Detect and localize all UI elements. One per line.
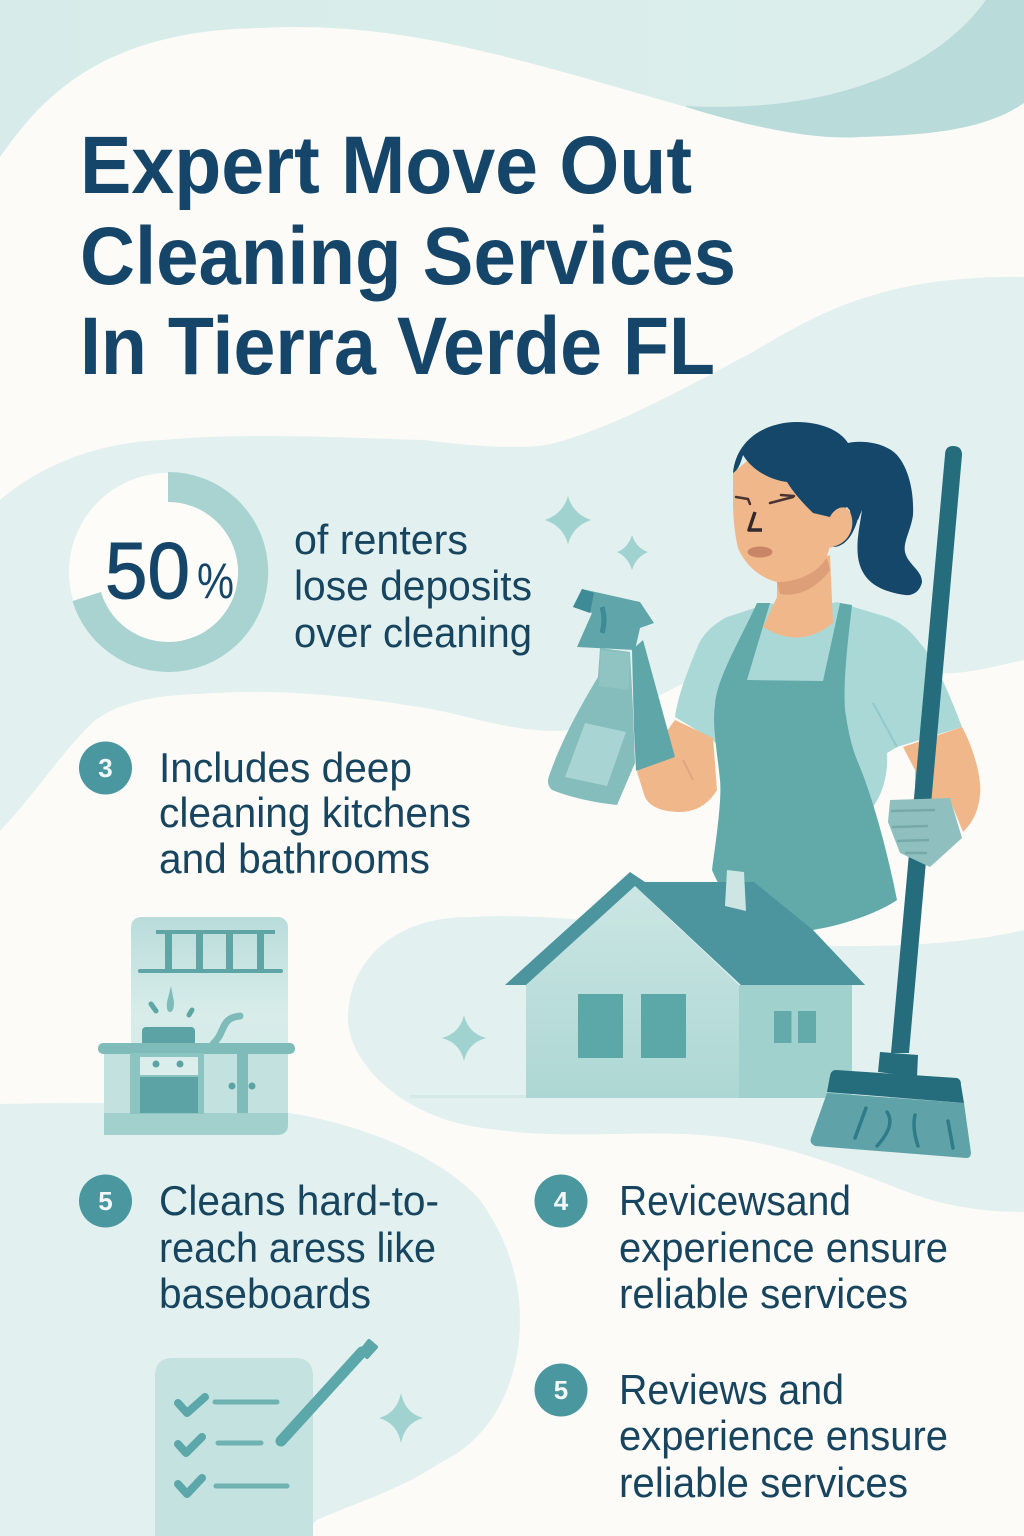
item 3: deep cleaning [79, 742, 471, 882]
stat text: renters lose deposits [294, 516, 532, 656]
title: In Tierra Verde FL [80, 301, 715, 392]
right glove [888, 798, 962, 867]
icon: sparkles near spray [545, 496, 648, 570]
stat text: renters lose deposits: of renters [294, 516, 468, 563]
item 5: reviews and experience: Reviews and [619, 1366, 844, 1413]
neck shadow [777, 558, 830, 595]
left arm [637, 720, 717, 812]
donut chart: 50%: % [197, 553, 234, 609]
item 5: hard-to-reach areas: baseboards [159, 1270, 371, 1317]
house roof over apron [690, 870, 865, 985]
face features [736, 495, 794, 558]
item 5: reviews and experience [534, 1364, 948, 1506]
shirt [675, 602, 962, 810]
ear [829, 507, 852, 548]
item 5: hard-to-reach areas: Cleans hard-to- [159, 1177, 439, 1224]
item 5: reviews and experience: experience ensure [619, 1412, 948, 1459]
face [733, 450, 832, 582]
illustration: woman cleaning [548, 422, 980, 1158]
item 4: reviews and experience: experience ensure [619, 1224, 948, 1271]
item 4: reviews and experience: 4 [554, 1186, 569, 1216]
item 5: reviews and experience: 5 [554, 1375, 568, 1405]
title: Cleaning Services [80, 211, 736, 302]
icon: sparkle near house [442, 1015, 486, 1061]
item 5: reviews and experience: reliable services [619, 1459, 908, 1506]
icon: kitchen [98, 917, 295, 1135]
title [80, 120, 736, 392]
item 5: hard-to-reach areas [79, 1174, 439, 1317]
item 3: deep cleaning: cleaning kitchens [159, 789, 471, 836]
item 3: deep cleaning: 3 [98, 753, 113, 783]
left glove [632, 640, 675, 771]
neck and chest [763, 555, 833, 638]
item 3: deep cleaning: and bathrooms [159, 835, 430, 882]
icon: sparkle near checklist [379, 1393, 423, 1443]
broom [810, 446, 971, 1158]
stat text: renters lose deposits: lose deposits [294, 562, 532, 609]
donut chart: 50%: 50 [105, 526, 190, 615]
donut chart: 50% [69, 472, 268, 672]
stat text: renters lose deposits: over cleaning [294, 609, 532, 656]
item 3: deep cleaning: Includes deep [159, 744, 412, 791]
item 4: reviews and experience: Revicewsand [619, 1177, 851, 1224]
title: Expert Move Out [80, 120, 692, 211]
item 4: reviews and experience [534, 1174, 948, 1317]
hair and ponytail [733, 422, 922, 595]
item 5: hard-to-reach areas: reach aress like [159, 1224, 436, 1271]
icon: checklist and pencil [155, 1341, 376, 1536]
right arm [903, 727, 980, 832]
icon: house [410, 872, 865, 1098]
spray bottle [548, 589, 654, 805]
item 4: reviews and experience: reliable services [619, 1270, 908, 1317]
hair behind ear [831, 510, 860, 547]
apron [712, 603, 897, 930]
item 5: hard-to-reach areas: 5 [98, 1186, 113, 1216]
